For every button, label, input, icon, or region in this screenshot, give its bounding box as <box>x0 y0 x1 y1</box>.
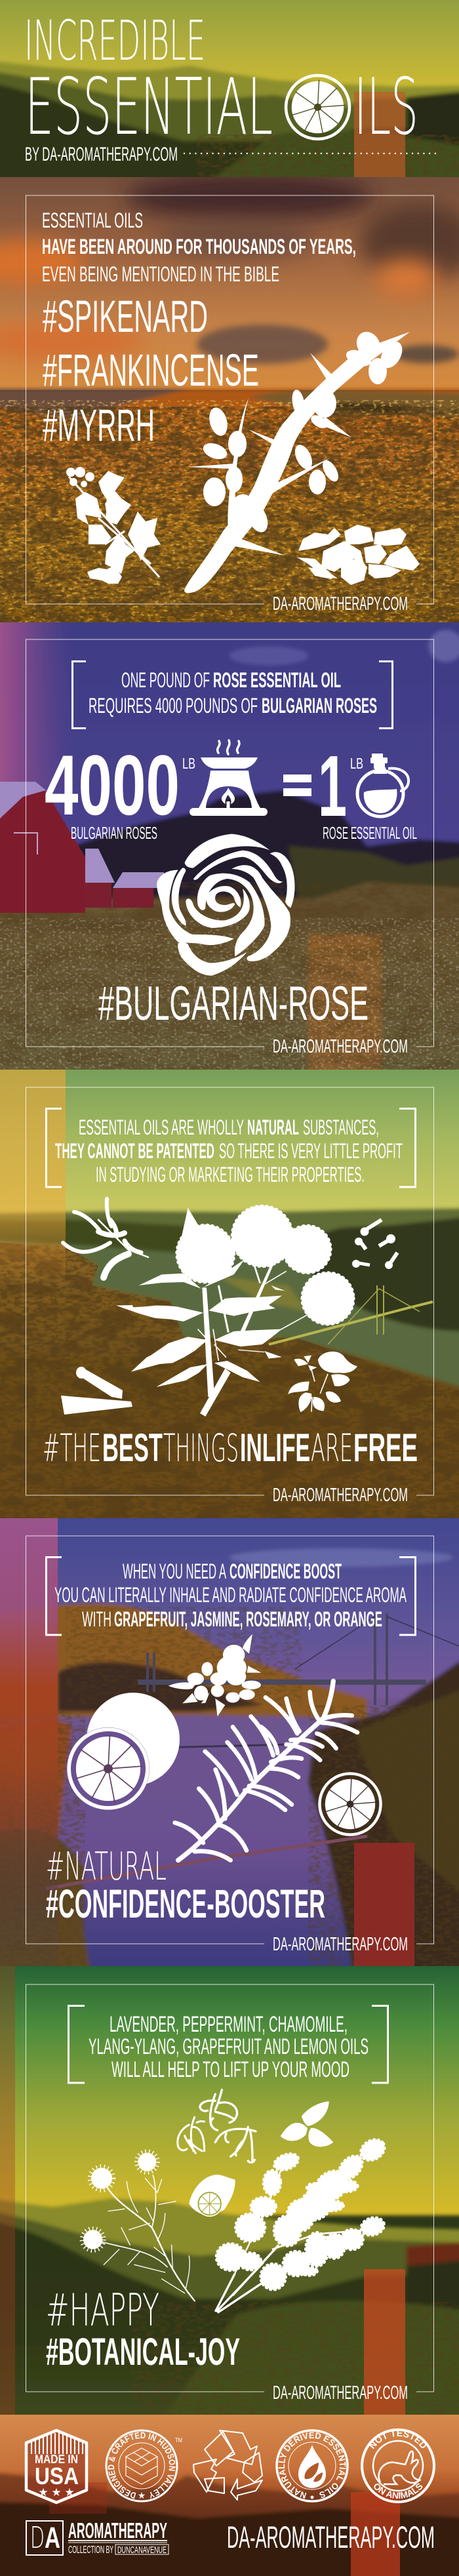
barn <box>0 782 164 913</box>
callout: confidence boost: WITH <box>82 1607 111 1631</box>
icon: rose <box>157 834 295 976</box>
icon: lemon <box>189 2175 235 2217</box>
callout: natural substances: THEY CANNOT BE PATENTED <box>55 1139 214 1163</box>
hashtag: the best things in life are free: THINGS <box>163 1426 239 1470</box>
icon: frankincense branch <box>184 327 410 593</box>
badge: made in usa: USA <box>35 2463 79 2489</box>
stat: 1 lb: LB <box>350 755 363 772</box>
callout: rose oil fact with brackets <box>72 661 392 728</box>
hashtags: ancient oils: #FRANKINCENSE <box>43 345 259 395</box>
callout: rose oil fact with brackets: ROSE ESSENTIAL OIL <box>213 668 341 692</box>
hashtag: the best things in life are free: BEST <box>102 1426 163 1470</box>
icon: ylang ylang flowers <box>178 2090 256 2162</box>
icon: rosemary sprig <box>175 1681 357 1861</box>
panel: frame 2 <box>26 639 434 1047</box>
panel: frame 3 <box>26 1087 434 1495</box>
callout: natural substances: NATURAL <box>247 1116 299 1139</box>
icon: citrus slice as letter O <box>286 75 349 139</box>
text block: history of essential oils: EVEN BEING MENTIONED IN THE BIBLE <box>42 262 279 286</box>
icon: spikenard plant <box>66 467 161 584</box>
panel: header background <box>0 0 459 190</box>
icon: eucalyptus sprig <box>63 1199 148 1278</box>
panel: river valley background <box>0 1057 459 1531</box>
icon: chamomile <box>83 2152 195 2301</box>
panel: footer background <box>0 2415 459 2576</box>
hashtags: ancient oils: #MYRRH <box>43 400 155 451</box>
equals sign <box>283 775 311 796</box>
panel: sunset hills background <box>0 1953 459 2426</box>
hashtag: the best things in life are free: INLIFE <box>240 1426 310 1470</box>
hashtag: the best things in life are free <box>43 1426 418 1470</box>
callout: lift your mood oils <box>68 2005 388 2083</box>
callout: rose oil fact with brackets: REQUIRES 4000 POUNDS OF <box>89 694 258 717</box>
logo: DA Aromatherapy collection by Duncan Avenue: D <box>30 2520 45 2555</box>
stat: 4000 lb: 4000 <box>45 737 180 833</box>
callout: confidence boost: WHEN YOU NEED A <box>123 1560 226 1583</box>
icon: jasmine flowers <box>169 1634 261 1716</box>
icon: lavender <box>215 2136 388 2313</box>
text block: history of essential oils <box>42 209 356 286</box>
logo: DA Aromatherapy collection by Duncan Avenue: AROMATHERAPY <box>68 2518 167 2543</box>
badge: designed and crafted in hudson valley: TM <box>175 2437 182 2444</box>
callout: natural substances: ESSENTIAL OILS ARE WHOLLY <box>79 1116 244 1139</box>
title: Incredible Essential Oils: INCREDIBLE <box>24 9 205 73</box>
icon: flowering herb <box>116 1207 352 1417</box>
icon: oil burner <box>190 740 268 816</box>
title: Incredible Essential Oils: ESSENTIAL <box>25 62 273 153</box>
panel: bridge and river background <box>0 1505 459 1977</box>
badge: naturally derived essential oils: NATURALLY DERIVED ESSENTIAL OILS <box>278 2432 346 2499</box>
logo: DA Aromatherapy collection by Duncan Avenue: COLLECTION BY <box>68 2545 113 2556</box>
icon: orange slice <box>319 1773 381 1835</box>
badge: made in usa: ★ ★ ★ <box>38 2486 75 2499</box>
badge: not tested on animals: NOT TESTED <box>370 2431 426 2449</box>
labels under stats: BULGARIAN ROSES <box>71 823 157 843</box>
hashtag: the best things in life are free: FREE <box>353 1426 418 1470</box>
icon: cloves <box>352 1220 397 1269</box>
labels under stats <box>71 823 417 843</box>
badge: recycling symbol <box>193 2430 262 2500</box>
panel: frame 5 <box>26 1984 434 2392</box>
hashtag: the best things in life are free: #THE <box>43 1426 101 1470</box>
hashtag: the best things in life are free: ARE <box>311 1426 353 1470</box>
callout: natural substances <box>46 1108 416 1187</box>
callout: confidence boost <box>46 1557 416 1635</box>
panel: frame 4 <box>26 1536 434 1944</box>
badge: designed and crafted in hudson valley: ★ <box>138 2490 146 2501</box>
callout: confidence boost: CONFIDENCE BOOST <box>230 1560 342 1583</box>
text block: history of essential oils: ESSENTIAL OILS <box>42 209 143 232</box>
logo: DA Aromatherapy collection by Duncan Avenue <box>26 2518 169 2556</box>
panel: sky and field background 1 <box>0 164 459 635</box>
icon: peppermint leaves <box>281 2101 333 2147</box>
hashtag: botanical joy: #BOTANICAL-JOY <box>46 2331 240 2373</box>
icon: oil bottle <box>357 754 409 816</box>
stat: 1 lb: 1 <box>318 738 347 834</box>
badge: not tested on animals: ON ANIMALS <box>374 2483 422 2499</box>
callout: natural substances: SUBSTANCES, <box>303 1116 379 1139</box>
title: Incredible Essential Oils <box>24 9 418 153</box>
hashtag: natural: #NATURAL <box>46 1843 167 1889</box>
icon: cinnamon sticks <box>61 1367 132 1415</box>
badge: not tested on animals <box>361 2428 435 2503</box>
hashtag: happy: #HAPPY <box>46 2285 159 2337</box>
stat: 4000 lb: LB <box>182 755 195 772</box>
badge: made in usa <box>26 2430 87 2503</box>
suspension bridges <box>46 1613 459 1889</box>
panel: rose section background <box>0 610 459 1082</box>
icon: myrrh resin <box>297 525 420 585</box>
hashtags: ancient oils: #SPIKENARD <box>43 291 208 342</box>
badge: made in usa: MADE IN <box>35 2453 78 2466</box>
logo: DA Aromatherapy collection by Duncan Avenue: DUNCANAVENUE <box>117 2545 167 2556</box>
icon: grapefruit whole and slice <box>67 1693 180 1810</box>
badge: designed and crafted in hudson valley: DESIGNED & CRAFTED IN HUDSON VALLEY <box>108 2432 176 2499</box>
panel: frame 1 <box>26 195 434 604</box>
icon: small rose plant <box>288 1352 357 1412</box>
hashtags: ancient oils <box>43 291 259 451</box>
callout: rose oil fact with brackets: ONE POUND OF <box>121 668 210 692</box>
logo: DA Aromatherapy collection by Duncan Avenue: A <box>45 2521 60 2554</box>
byline with dotted rule: BY DA-AROMATHERAPY.COM <box>25 144 178 165</box>
